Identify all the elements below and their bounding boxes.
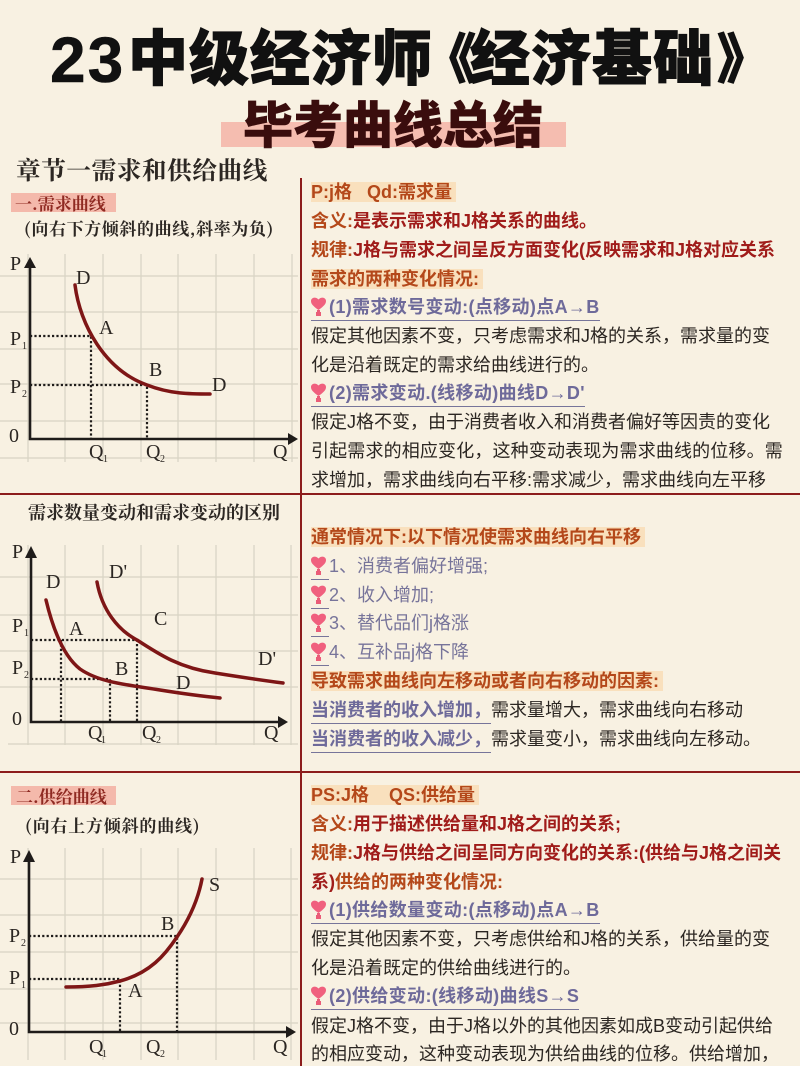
chart: supply curve: 2 (160, 1049, 165, 1060)
chart: demand shift: P (12, 615, 23, 637)
horizontal divider 2 (0, 771, 800, 773)
chart: supply curve: B (161, 913, 174, 935)
chart: demand shift: 0 (12, 708, 22, 730)
section text: supply: (1)供给数量变动:(点移动)点A→B (329, 900, 600, 920)
chart: demand shift: 2 (24, 670, 29, 681)
chart: demand curve: 1 (22, 341, 27, 352)
chart: supply curve: S (209, 874, 220, 896)
section text: demand: 需求的两种变化情况: (311, 269, 479, 289)
chart: supply curve: Q (273, 1036, 288, 1058)
title: 《 (422, 30, 476, 90)
chart: demand shift: Q (142, 722, 157, 744)
chart: demand shift: D' (258, 648, 276, 670)
horizontal divider 1 (0, 493, 800, 495)
section text: shift factors: 1、消费者偏好增强; (329, 556, 488, 576)
section text: supply: 的相应变动，这种变动表现为供给曲线的位移。供给增加， (311, 1044, 779, 1064)
chart: demand shift (0, 541, 298, 746)
chart: demand shift: 2 (156, 735, 161, 746)
section text: supply: 系)供给的两种变化情况: (311, 872, 503, 892)
chart: supply curve: 2 (21, 938, 26, 949)
section text: shift factors: 3、替代品们j格涨 (329, 613, 469, 633)
section text: shift factors: 需求量增大，需求曲线向右移动 (491, 700, 743, 720)
chapter heading: 章节一需求和供给曲线 (16, 152, 268, 187)
chart: supply curve: 0 (9, 1018, 19, 1040)
section text: supply: 假定其他因素不变，只考虑供给和J格的关系，供给量的变 (311, 929, 770, 949)
chart: supply curve: P (10, 846, 21, 868)
chart: demand shift: 1 (101, 735, 106, 746)
chart: supply curve: P (9, 967, 20, 989)
title: 经济基础 (470, 26, 714, 93)
section label: demand curve (11, 193, 116, 212)
chart: demand curve: 2 (160, 454, 165, 465)
chart: demand shift: A (69, 618, 84, 640)
section text: demand (311, 182, 783, 490)
chart: demand shift: Q (88, 722, 103, 744)
section text: demand: 求增加，需求曲线向右平移:需求减少，需求曲线向左平移 (311, 470, 766, 490)
section text: demand: 规律:J格与需求之间呈反方面变化(反映需求和J格对应关系 (311, 240, 775, 260)
section text: supply (311, 785, 781, 1064)
section text: demand: (1)需求数号变动:(点移动)点A→B (329, 297, 600, 317)
title: 中级经济师 (128, 26, 433, 93)
chart: demand shift: D' (109, 561, 127, 583)
section text: demand: (2)需求变动.(线移动)曲线D→D' (329, 383, 585, 403)
supply curve note: (向右上方倾斜的曲线) (25, 812, 200, 837)
chart: demand curve: B (149, 359, 162, 381)
chart: demand curve: Q (89, 441, 104, 463)
chart: supply curve: A (128, 980, 143, 1002)
section text: shift factors: 需求量变小，需求曲线向左移动。 (491, 729, 761, 749)
section text: supply: 含义:用于描述供给量和J格之间的关系; (311, 814, 621, 834)
section text: shift factors: 4、互补品j格下降 (329, 642, 469, 662)
chart: supply curve: Q (146, 1036, 161, 1058)
section text: supply: 规律:J格与供给之间呈同方向变化的关系:(供给与J格之间关 (311, 843, 781, 863)
chart: demand shift: C (154, 608, 167, 630)
title (50, 24, 771, 96)
section text: shift factors: 2、收入增加; (329, 585, 434, 605)
chart heading: difference: 需求数量变动和需求变动的区别 (28, 499, 280, 525)
section label: supply curve: 二.供给曲线 (16, 783, 107, 808)
section text: shift factors: 通常情况下:以下情况使需求曲线向右平移 (311, 527, 641, 547)
chart: demand shift: D (46, 571, 60, 593)
section text: shift factors: 导致需求曲线向左移动或者向右移动的因素: (311, 671, 659, 691)
chart: demand curve: Q (273, 441, 288, 463)
section text: demand: 假定其他因素不变，只考虑需求和J格的关系，需求量的变 (311, 326, 770, 346)
chart: demand shift: D (176, 672, 190, 694)
section text: demand: 化是沿着既定的需求给曲线进行的。 (311, 355, 599, 375)
section text: demand: 引起需求的相应变化，这种变动表现为需求曲线的位移。需 (311, 441, 783, 461)
chart: demand curve: 2 (22, 389, 27, 400)
chart: supply curve: 1 (102, 1049, 107, 1060)
chart: demand curve: D (212, 374, 226, 396)
vertical divider (300, 178, 302, 1066)
chart: demand shift: P (12, 541, 23, 563)
chart: demand curve: Q (146, 441, 161, 463)
chart: demand curve: A (99, 317, 114, 339)
chart: demand shift: P (12, 657, 23, 679)
section text: demand: 假定J格不变，由于消费者收入和消费者偏好等因责的变化 (311, 412, 770, 432)
chart: supply curve (0, 846, 298, 1060)
chart: demand shift: B (115, 658, 128, 680)
chart: demand shift: 1 (24, 628, 29, 639)
chart: supply curve: P (9, 925, 20, 947)
section text: shift factors: 当消费者的收入增加， (311, 700, 491, 720)
section text: demand: 含义:是表示需求和J格关系的曲线。 (311, 211, 597, 231)
chart: demand shift: Q (264, 722, 279, 744)
section text: shift factors: 当消费者的收入减少， (311, 729, 491, 749)
section label: demand curve: 一.需求曲线 (15, 190, 106, 215)
section text: supply: 化是沿着既定的供给曲线进行的。 (311, 958, 581, 978)
demand curve note: (向右下方倾斜的曲线,斜率为负) (24, 215, 274, 240)
section label: supply curve (11, 786, 116, 805)
subtitle highlight bar (221, 122, 566, 147)
chart: demand curve (0, 253, 298, 465)
section text: supply: (2)供给变动:(线移动)曲线S→S (329, 986, 579, 1006)
chart: demand curve: 1 (103, 454, 108, 465)
chart: demand curve: P (10, 253, 21, 275)
title: 23 (50, 24, 125, 96)
section text: supply: 假定J格不变，由于J格以外的其他因素如成B变动引起供给 (311, 1016, 773, 1036)
chart: demand curve: D (76, 267, 90, 289)
subtitle: 毕考曲线总结 (243, 98, 543, 154)
chart: demand curve: 0 (9, 425, 19, 447)
chart: demand curve: P (10, 376, 21, 398)
title: 》 (717, 30, 771, 90)
chart: supply curve: Q (89, 1036, 104, 1058)
section text: supply: PS:J格 QS:供给量 (311, 785, 475, 805)
chart: supply curve: 1 (21, 980, 26, 991)
chart: demand curve: P (10, 328, 21, 350)
section text: demand: P:j格 Qd:需求量 (311, 182, 452, 202)
section text: shift factors (311, 527, 761, 753)
